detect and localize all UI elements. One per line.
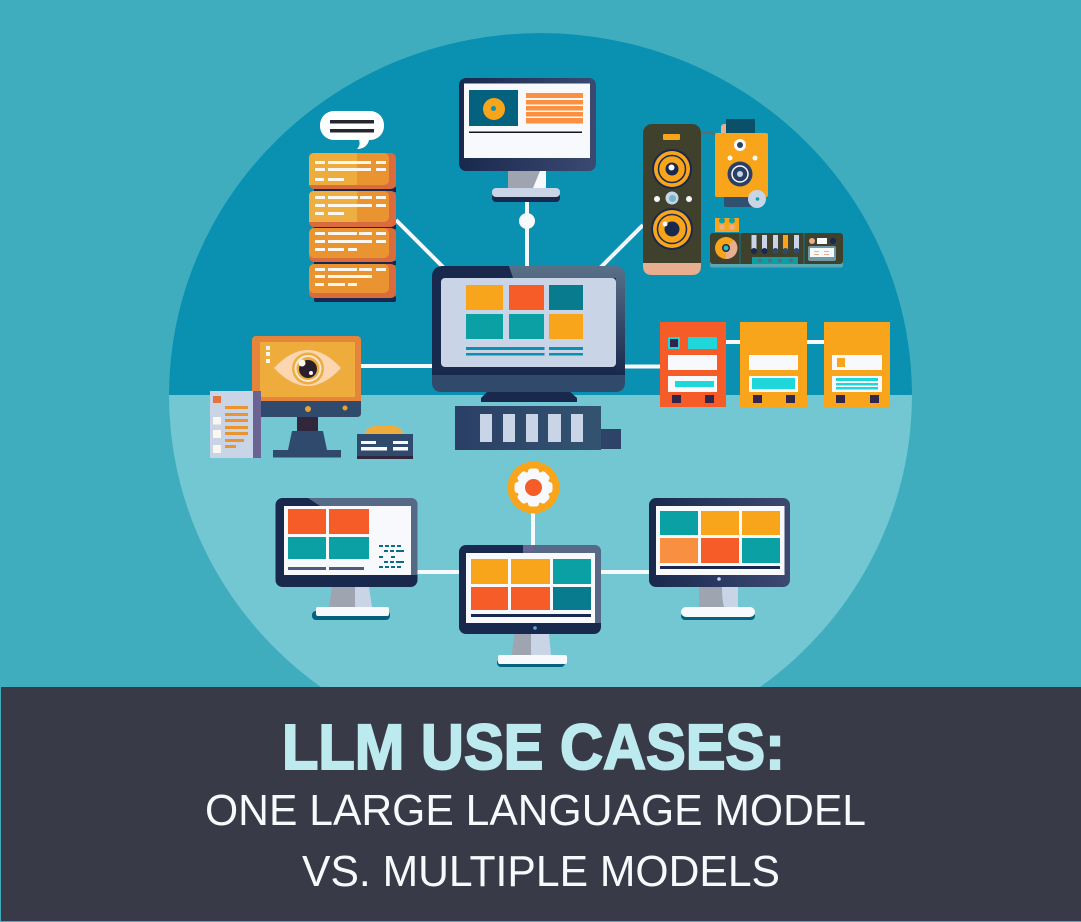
icon: gear bbox=[508, 462, 560, 514]
subtitle line 2: VS. MULTIPLE MODELS bbox=[302, 847, 780, 896]
title: LLM USE CASES: LLM USE CASES: bbox=[282, 711, 785, 783]
speech bubble bbox=[320, 111, 384, 149]
title band bbox=[1, 687, 1081, 921]
card: orange-red module bbox=[660, 322, 726, 407]
subtitle line 1: ONE LARGE LANGUAGE MODEL bbox=[205, 786, 866, 835]
monitor: bottom centre bbox=[459, 545, 601, 667]
document sheet bbox=[210, 391, 261, 458]
circle upper half: sky bbox=[169, 33, 912, 395]
circle lower half: floor bbox=[169, 33, 912, 757]
connector lines bbox=[361, 200, 825, 572]
small card device bbox=[357, 426, 413, 459]
card: amber module middle bbox=[740, 322, 807, 407]
icon: server stack bbox=[309, 153, 396, 302]
eye monitor bbox=[252, 336, 361, 458]
network switch box bbox=[455, 406, 621, 450]
amplifier unit bbox=[701, 119, 768, 208]
monitor: bottom right bbox=[649, 498, 790, 620]
monitor: bottom left bbox=[276, 498, 418, 620]
main central monitor bbox=[432, 266, 625, 402]
card: amber module right bbox=[824, 322, 890, 407]
mixer console bbox=[710, 218, 843, 268]
speaker tower bbox=[643, 124, 701, 275]
top monitor: media display bbox=[459, 78, 596, 202]
node on top connector bbox=[519, 213, 535, 229]
